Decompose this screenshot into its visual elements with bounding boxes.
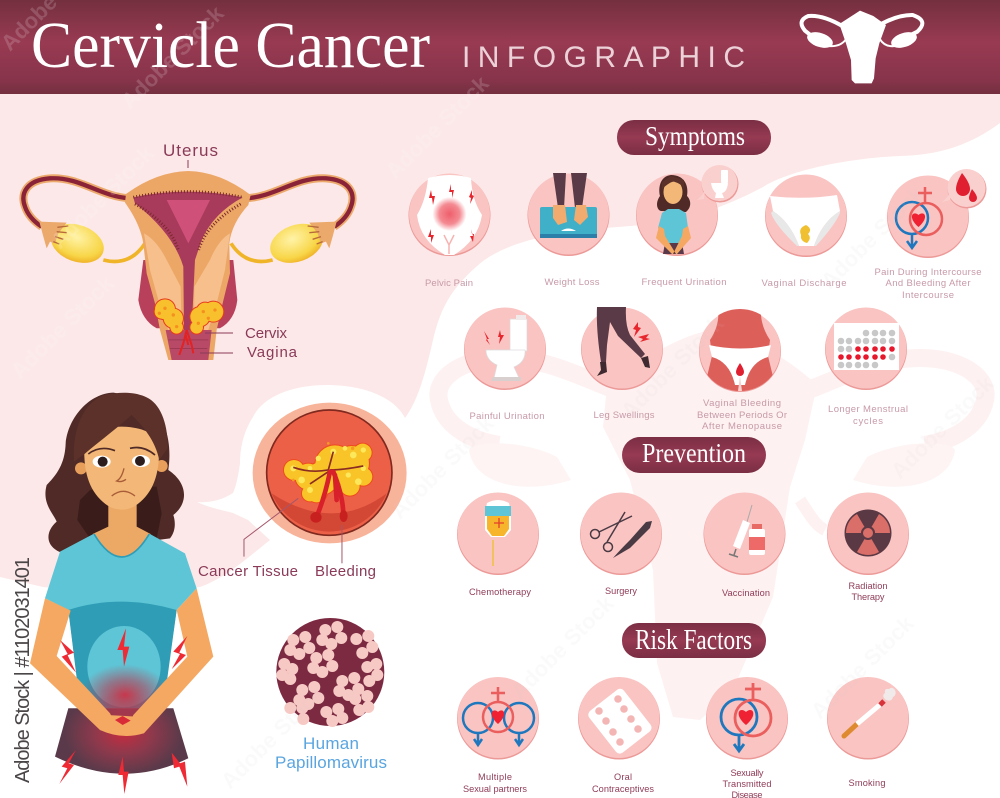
prevention: surgery: Surgery (605, 586, 637, 596)
outer wall (138, 260, 237, 328)
hair back (45, 393, 184, 553)
speech bubble with toilet (697, 165, 738, 202)
symptom: pain during intercourse (874, 169, 986, 301)
risk: oral contraceptives: Contraceptives (592, 784, 654, 794)
cancer tumours (154, 298, 224, 335)
stock watermarks: Adobe Stock (116, 0, 229, 114)
stock watermarks: Adobe Stock (386, 410, 499, 524)
virus sphere (276, 618, 384, 727)
stock watermarks: Adobe Stock (886, 370, 999, 484)
eyes (88, 447, 155, 468)
title: Cervicle Cancer (31, 9, 430, 82)
pain bolts (59, 628, 187, 794)
prevention: chemotherapy (457, 492, 539, 597)
symptom: weight loss: Weight Loss (544, 277, 600, 288)
panel: symptoms (408, 120, 986, 432)
risk: sexually transmitted disease (706, 677, 788, 798)
subtitle: INFOGRAPHIC (462, 41, 745, 74)
label: Human Papillomavirus: Human (303, 734, 359, 753)
cancer tissue circle (244, 403, 407, 563)
prevention: vaccination: Vaccination (722, 588, 770, 598)
fallopian tubes (23, 178, 353, 227)
vagina (166, 330, 212, 360)
uterine cavity (133, 192, 243, 330)
label: Vagina (200, 344, 298, 361)
stock watermarks: Adobe Stock (506, 590, 619, 704)
risk: sexually transmitted disease: Sexually (730, 768, 764, 778)
prevention: radiation therapy: Therapy (852, 592, 885, 602)
symptom: leg swellings (581, 307, 663, 421)
label: Uterus: Uterus (163, 141, 218, 160)
left ovary (39, 217, 145, 270)
symptom: longer menstrual cycles: cycles (853, 416, 883, 427)
symptom: frequent urination: Frequent Urination (642, 277, 726, 288)
symptom: painful urination: Painful Urination (470, 411, 544, 422)
symptom: weight loss (528, 173, 610, 288)
bleeding (317, 472, 343, 517)
t-shirt (45, 534, 197, 708)
panel: prevention (457, 437, 909, 602)
blood drops (310, 510, 348, 523)
symptom: pain during intercourse: Pain During Intercourse (874, 267, 982, 278)
stock watermarks: Adobe Stock (381, 70, 494, 184)
neck (93, 505, 151, 557)
label: Cervix: Cervix (245, 325, 288, 342)
risk: oral contraceptives (578, 677, 660, 794)
stock watermarks: Adobe Stock (46, 140, 159, 254)
bleeding (179, 330, 193, 355)
right ovary (231, 217, 337, 270)
muscle layer (125, 171, 251, 360)
abdominal pain glow (65, 664, 182, 775)
prevention: radiation therapy (827, 492, 909, 602)
label: Vagina: Vagina (247, 344, 298, 361)
face (75, 462, 87, 474)
bleeding pointer (340, 525, 343, 563)
heading: prevention (622, 437, 766, 473)
symptom: pelvic pain: Pelvic Pain (425, 278, 473, 289)
risk: multiple sexual partners: Sexual partners (463, 784, 527, 794)
risk: oral contraceptives: Oral (614, 772, 632, 782)
arms (30, 598, 120, 733)
symptom: pelvic pain (408, 174, 490, 289)
fissures (293, 452, 363, 484)
prevention: chemotherapy: Chemotherapy (469, 587, 531, 597)
nose and mouth (112, 468, 135, 496)
woman figure (30, 393, 213, 794)
tumour (283, 443, 373, 503)
icon: uterus silhouette (802, 11, 922, 83)
risk: smoking: Smoking (848, 778, 886, 788)
symptom: longer menstrual cycles (825, 308, 908, 427)
uterus diagram (23, 171, 353, 360)
label: Bleeding: Bleeding (315, 563, 376, 580)
heading: symptoms: Symptoms (645, 121, 745, 151)
skirt (55, 708, 188, 774)
outer ring (253, 403, 407, 543)
symptom: painful urination (464, 308, 546, 422)
prevention: radiation therapy: Radiation (848, 581, 888, 591)
symptom: vaginal discharge (762, 174, 847, 289)
hair front (74, 393, 168, 462)
stock watermarks: Adobe Stock (216, 680, 329, 794)
stock id vertical text: Adobe Stock | #1102031401 (12, 557, 34, 783)
heading: prevention: Prevention (642, 438, 746, 468)
symptom: pain during intercourse: Intercourse (902, 290, 954, 301)
speech bubble with drops (942, 169, 986, 208)
risk: multiple sexual partners: Multiple (478, 772, 512, 782)
heading: risk factors: Risk Factors (635, 625, 752, 656)
risk: multiple sexual partners (457, 677, 539, 794)
stock watermarks: Adobe Stock (6, 270, 119, 384)
symptom: vaginal bleeding: Between Periods Or (697, 410, 787, 421)
prevention: surgery (580, 492, 662, 596)
symptom: pain during intercourse: And Bleeding After (886, 278, 970, 289)
symptom: frequent urination (636, 165, 738, 288)
symptom: longer menstrual cycles: Longer Menstrual (828, 404, 908, 415)
symptom: vaginal bleeding (697, 309, 787, 432)
human papillomavirus (276, 618, 384, 753)
symptom: vaginal bleeding: Vaginal Bleeding (703, 398, 781, 409)
tissue pointer (244, 498, 298, 557)
panel: risk factors (457, 623, 909, 798)
stock watermarks: Adobe Stock (806, 610, 919, 724)
heading: symptoms (617, 120, 771, 155)
symptom: leg swellings: Leg Swellings (594, 410, 655, 421)
stock watermarks: Adobe Stock (816, 180, 929, 294)
label: Cervix (205, 325, 288, 342)
risk: smoking (827, 677, 909, 788)
symptom: vaginal bleeding: After Menopause (702, 421, 782, 432)
symptom: vaginal discharge: Vaginal Discharge (762, 278, 846, 289)
label line two: Papillomavirus (275, 753, 387, 772)
stock watermarks: Adobe Stock (616, 310, 729, 424)
risk: sexually transmitted disease: Transmitted (722, 779, 772, 789)
header banner (0, 0, 1000, 94)
prevention: vaccination (704, 492, 786, 598)
label: Cancer Tissue: Cancer Tissue (198, 563, 298, 580)
